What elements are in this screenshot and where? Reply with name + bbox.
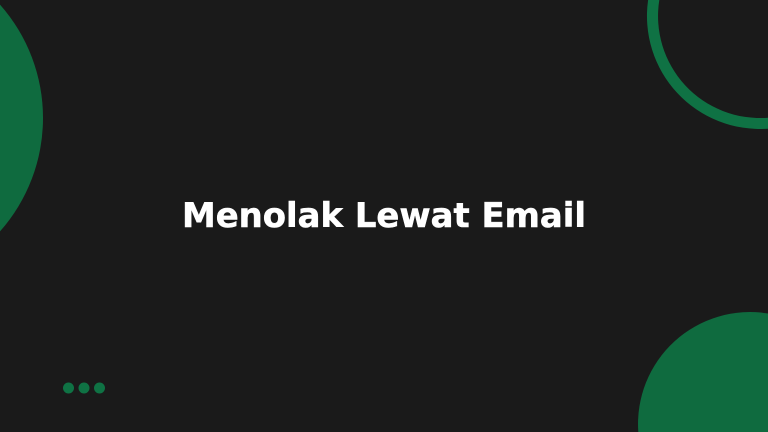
title: Menolak Lewat Email: [182, 196, 586, 235]
three dots icon: [63, 382, 105, 394]
green ring: top right: [647, 0, 768, 129]
green circle: left edge: [0, 5, 43, 231]
green circle: bottom right: [638, 312, 768, 432]
